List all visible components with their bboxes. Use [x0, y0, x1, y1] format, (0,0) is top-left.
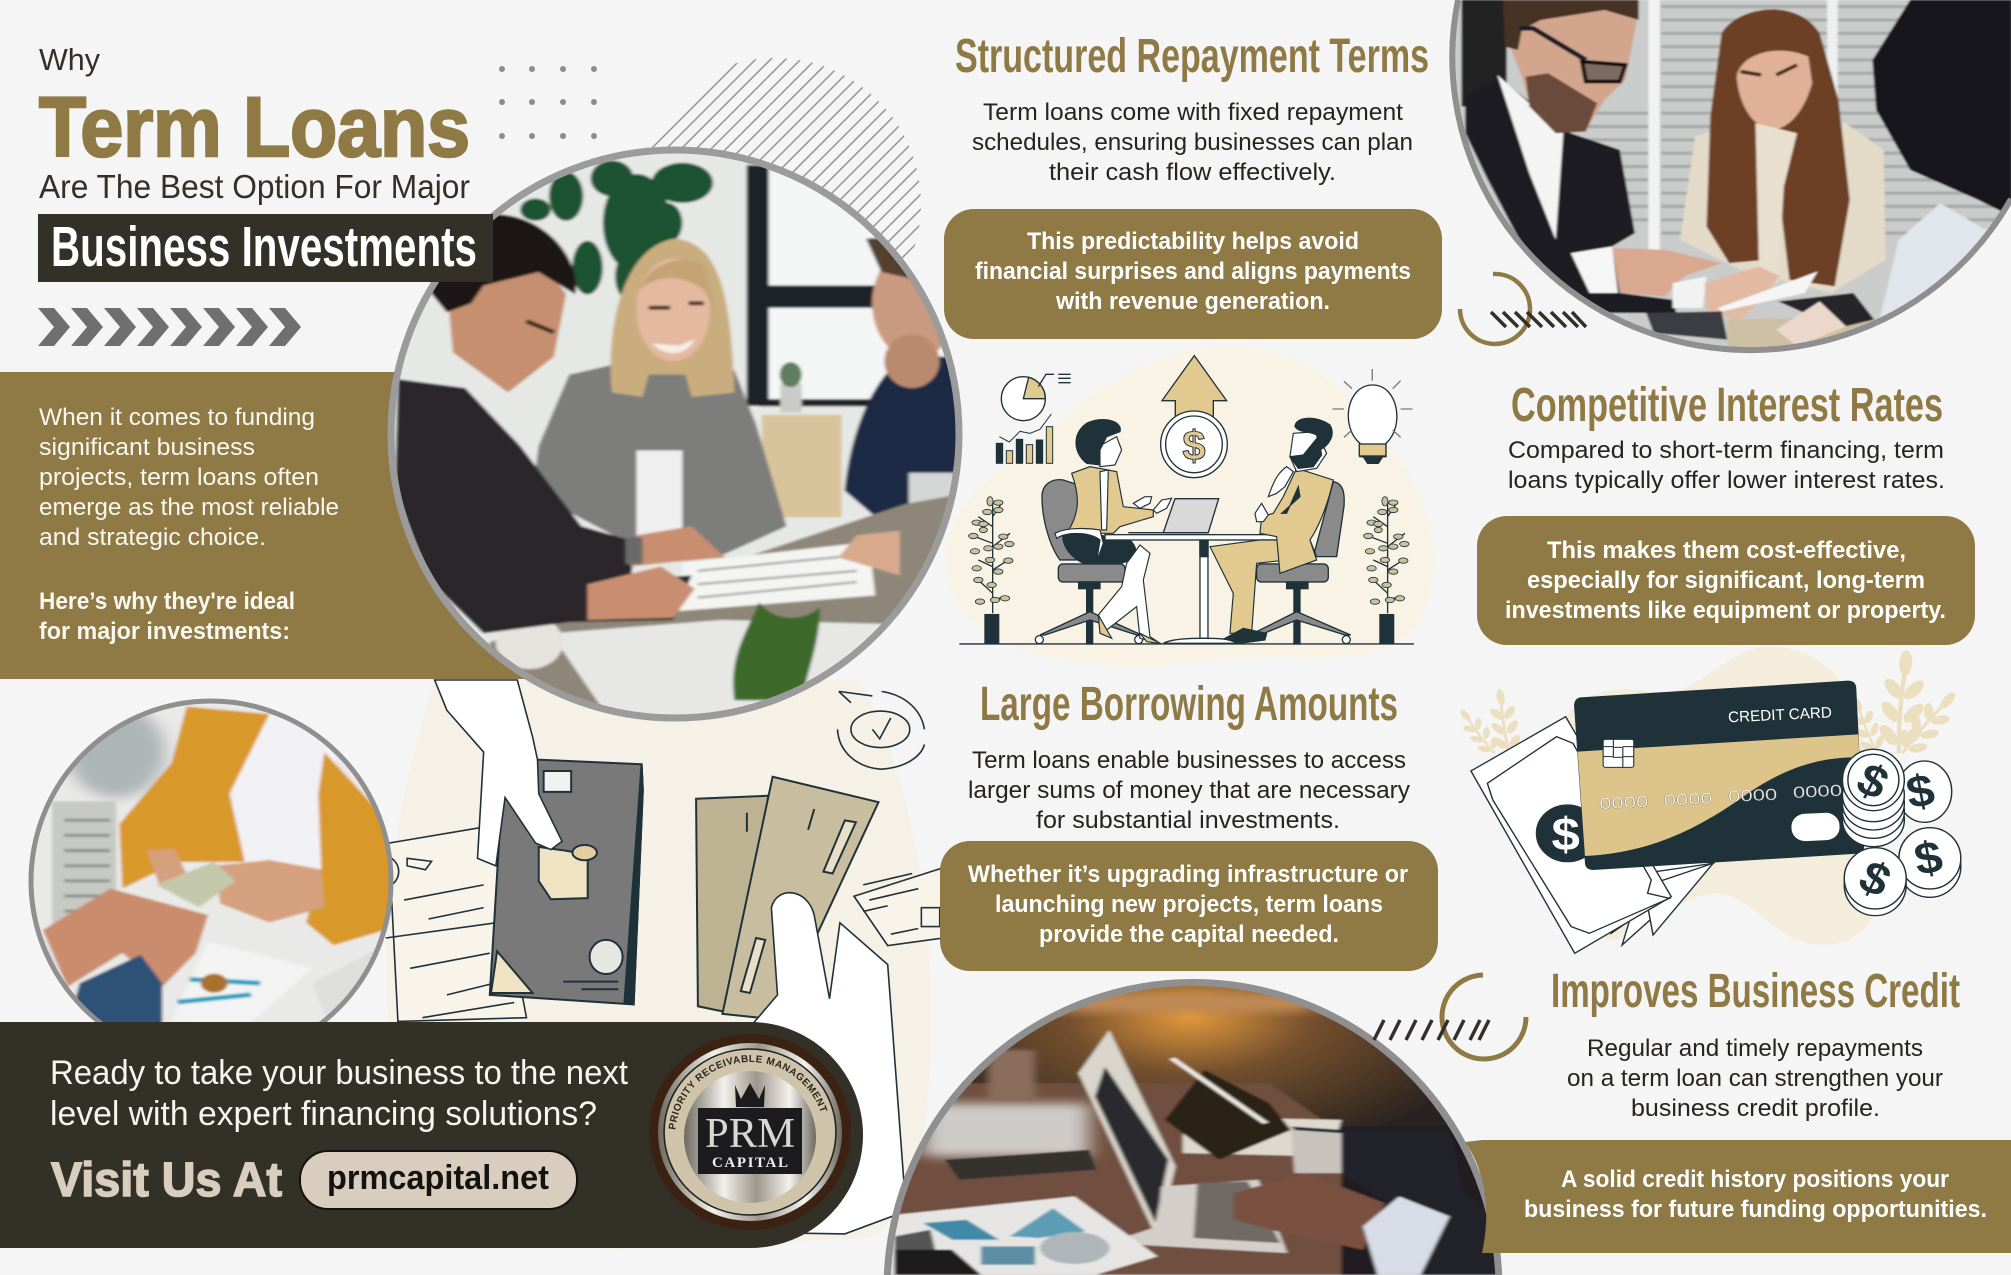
intro text: When it comes to funding — [39, 404, 315, 431]
callout pill: investments like equipment or property. — [1505, 597, 1946, 624]
beige backdrop — [386, 680, 931, 1249]
callout pill: Whether it’s upgrading infrastructure or — [968, 861, 1408, 888]
laptop — [1078, 1030, 1287, 1253]
callout pill — [944, 209, 1442, 339]
man writing — [395, 214, 725, 633]
banknotes: $ — [1551, 809, 1580, 860]
beige blob — [946, 346, 1433, 666]
body text: Term loans enable businesses to access — [972, 747, 1406, 774]
title: Why: Why — [39, 42, 100, 77]
website pill — [300, 1151, 577, 1209]
body text — [972, 99, 1413, 186]
woman figure — [1055, 420, 1172, 644]
table and tablets — [1646, 271, 1874, 353]
title: Term Loans: Term Loans — [39, 80, 470, 174]
intro text: and strategic choice. — [39, 524, 266, 551]
card label: CREDIT CARD — [1728, 704, 1832, 726]
table — [1105, 499, 1302, 643]
callout banner: business for future funding opportunities. — [1524, 1196, 1987, 1223]
heading: Structured Repayment Terms — [955, 30, 1429, 83]
CTA text: Ready to take your business to the next — [50, 1054, 629, 1092]
left hand — [435, 680, 562, 866]
CTA text — [50, 1054, 629, 1133]
left chair — [1035, 480, 1143, 644]
dot grid — [499, 66, 597, 139]
body text: on a term loan can strengthen your — [1567, 1065, 1943, 1092]
section: Structured Repayment Terms — [944, 30, 1442, 339]
orange blazer — [119, 707, 398, 945]
coin stacks: $ — [1849, 753, 1897, 809]
deco arc and ticks: bottom — [1374, 975, 1526, 1059]
ground line — [959, 642, 1414, 646]
printed charts — [880, 1196, 1158, 1275]
body text — [968, 747, 1411, 834]
card number: 0000 — [1792, 781, 1843, 802]
badge ring text: PRIORITY RECEIVABLE MANAGEMENT — [668, 1055, 828, 1130]
title block — [38, 42, 493, 282]
heading: Large Borrowing Amounts — [980, 678, 1398, 731]
callout banner: A solid credit history positions your — [1561, 1166, 1949, 1193]
desk — [880, 1083, 1341, 1275]
person in foreground — [1872, 0, 2011, 333]
panel: call to action — [0, 1022, 863, 1248]
light bulb — [1332, 369, 1413, 463]
bar chart — [996, 414, 1053, 463]
decorative striped semicircle — [652, 58, 921, 258]
body text: for substantial investments. — [1036, 807, 1340, 834]
main meeting photo — [379, 134, 979, 723]
callout pill: provide the capital needed. — [1039, 921, 1339, 948]
coin stacks: $ — [1851, 850, 1899, 906]
body text: business credit profile. — [1631, 1095, 1880, 1122]
card number — [1599, 781, 1843, 813]
PRM Capital logo badge — [649, 1034, 851, 1230]
body text: larger sums of money that are necessary — [968, 777, 1411, 804]
body text: Term loans come with fixed repayment — [983, 99, 1403, 126]
section: Large Borrowing Amounts — [940, 678, 1438, 971]
dollar coin — [1161, 411, 1227, 478]
CAPITAL wordmark: CAPITAL — [712, 1155, 788, 1171]
callout banner — [1465, 1140, 2011, 1253]
plants — [969, 497, 1409, 644]
CTA text: level with expert financing solutions? — [50, 1095, 597, 1133]
panel: gold introduction — [0, 372, 540, 679]
illustration: business meeting — [946, 346, 1433, 666]
hands and cash — [37, 849, 324, 1029]
body text: Regular and timely repayments — [1587, 1035, 1923, 1062]
man on right — [842, 236, 956, 516]
Visit Us At: Visit Us At — [51, 1154, 282, 1207]
callout pill: This predictability helps avoid — [1027, 228, 1359, 255]
right paper — [854, 868, 943, 946]
callout pill — [940, 841, 1438, 971]
lower left photo — [28, 698, 394, 1022]
intro text: Here’s why they're ideal — [39, 588, 295, 615]
green plants — [520, 161, 713, 301]
intro text: emerge as the most reliable — [39, 494, 339, 521]
PRM wordmark: PRM — [705, 1111, 795, 1157]
illustration: hands exchanging wallet and cash — [386, 680, 943, 1249]
subtitle: Are The Best Option For Major — [39, 168, 470, 205]
right hand — [612, 893, 906, 1234]
intro text — [39, 404, 339, 645]
suit sleeve — [1289, 1126, 1454, 1275]
table and contract — [174, 943, 374, 1022]
building model — [52, 801, 116, 926]
office window — [747, 165, 955, 517]
section: Competitive Interest Rates — [1477, 379, 1975, 645]
chip — [1603, 739, 1634, 767]
crown — [735, 1083, 765, 1107]
hand with pen — [1165, 1058, 1291, 1160]
dollar coin: $ — [1182, 422, 1206, 469]
body text: their cash flow effectively. — [1049, 159, 1336, 186]
callout pill: with revenue generation. — [1055, 288, 1330, 315]
title: Business Investments — [38, 214, 493, 282]
body text — [1567, 1035, 1943, 1122]
coin stacks: $ — [1910, 830, 1946, 885]
left paper cheque — [386, 826, 526, 1021]
man with glasses — [1465, 0, 1722, 313]
callout pill: This makes them cost-effective, — [1547, 537, 1906, 564]
hand on keyboard — [1233, 1173, 1385, 1250]
credit card — [1574, 681, 1864, 870]
table and documents — [488, 495, 948, 704]
woman with long hair — [1673, 9, 1886, 321]
arrow up — [1162, 356, 1227, 420]
callout pill: financial surprises and aligns payments — [975, 258, 1411, 285]
intro text: projects, term loans often — [39, 464, 319, 491]
beige blob — [1555, 647, 1885, 945]
top right photo — [1450, 0, 2011, 360]
intro text: for major investments: — [39, 618, 290, 645]
coin stacks: $ — [1902, 764, 1938, 818]
bottom center photo — [880, 980, 1514, 1275]
body text — [1508, 437, 1945, 494]
right chair — [1250, 482, 1351, 644]
illustration: credit card, cash and coins — [1451, 647, 1968, 953]
card number: 0000 — [1599, 793, 1649, 813]
body text: schedules, ensuring businesses can plan — [972, 129, 1413, 156]
seated woman — [532, 239, 786, 555]
leaf sprigs — [1451, 649, 1968, 764]
section: Improves Business Credit — [1465, 965, 2011, 1253]
body text: loans typically offer lower interest rates. — [1508, 467, 1945, 494]
banknotes — [696, 777, 879, 1020]
card number: 0000 — [1663, 789, 1713, 810]
banknotes — [1471, 717, 1713, 953]
callout pill — [1477, 516, 1975, 645]
pie chart — [1001, 374, 1071, 421]
callout pill: launching new projects, term loans — [995, 891, 1383, 918]
title: Business Investments: Business Investments — [51, 215, 477, 279]
coin stacks — [1842, 749, 1961, 916]
callout pill: especially for significant, long-term — [1527, 567, 1925, 594]
intro text: significant business — [39, 434, 255, 461]
man figure — [1210, 418, 1333, 643]
wallet — [490, 760, 643, 1004]
body text: Compared to short-term financing, term — [1508, 437, 1944, 464]
card number: 0000 — [1728, 785, 1778, 806]
website pill: prmcapital.net — [327, 1159, 549, 1197]
arrows: chevron row — [38, 308, 301, 346]
deco arc and ticks: top right — [1460, 274, 1586, 344]
approval check bubble — [837, 691, 924, 769]
